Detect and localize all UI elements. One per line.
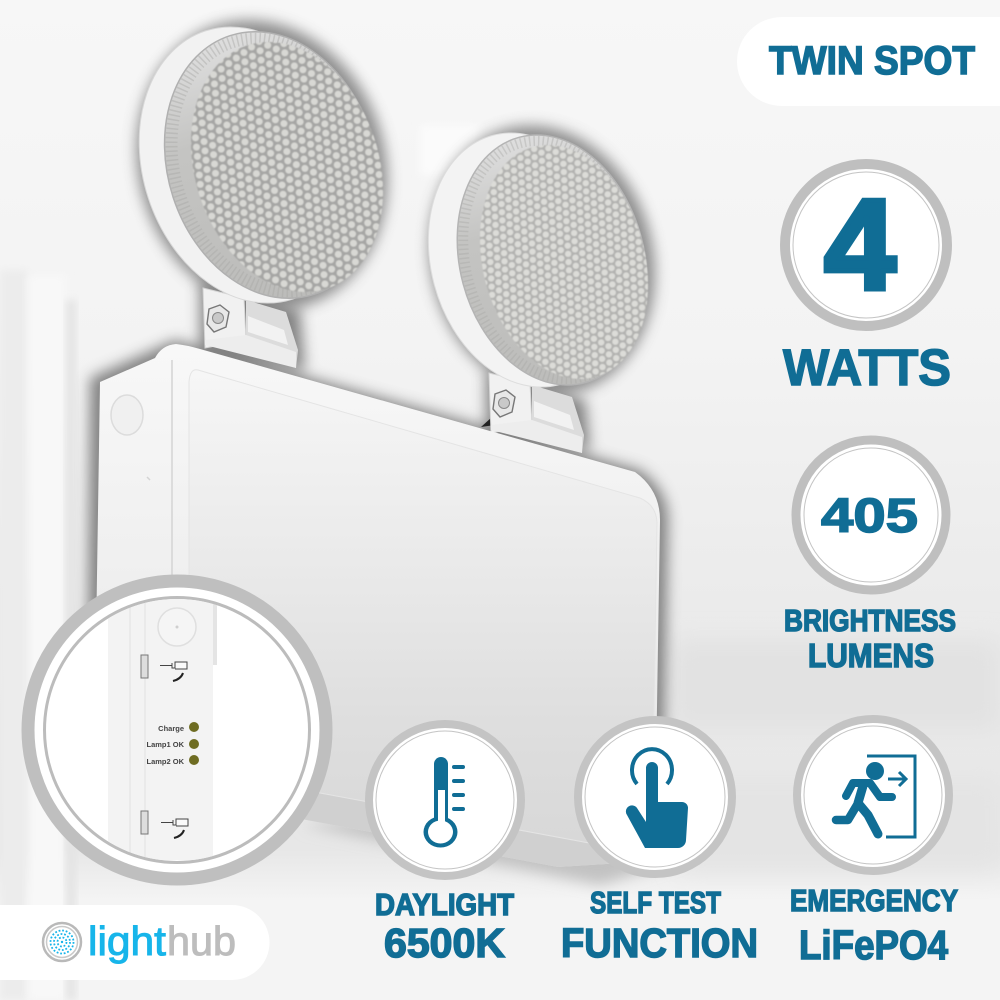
inner line — [585, 727, 725, 867]
ring — [796, 440, 946, 590]
label: Charge: Charge — [158, 724, 184, 733]
ring — [785, 164, 947, 326]
inner line — [804, 726, 942, 864]
emergency label: EMERGENCY — [790, 883, 958, 918]
number 4: 4 — [824, 173, 896, 317]
badge text: TWIN SPOT — [769, 39, 975, 83]
watts label: WATTS — [783, 339, 951, 396]
mounting bracket — [489, 373, 584, 453]
ring — [578, 720, 732, 874]
function label: FUNCTION — [561, 920, 758, 966]
stat: 4 watts — [783, 164, 951, 396]
ring — [797, 719, 949, 871]
lamp housing — [105, 0, 393, 332]
lens rim — [430, 114, 674, 406]
6500K label: 6500K — [384, 920, 505, 966]
brightness label: BRIGHTNESS — [784, 603, 956, 638]
icon: thermometer — [424, 757, 463, 848]
cable — [481, 417, 495, 427]
badge: twin spot — [737, 17, 1000, 106]
pill background — [0, 905, 270, 980]
enclosure side detail — [108, 590, 217, 860]
stat: 405 lumens — [784, 440, 956, 674]
lens dot texture — [160, 17, 414, 317]
number 405: 405 — [821, 490, 918, 543]
enclosure front panel — [189, 370, 657, 843]
status LEDs — [189, 722, 199, 765]
lamp shadow glow — [400, 100, 684, 420]
inner line — [376, 731, 514, 869]
lumens label: LUMENS — [808, 637, 934, 674]
rim ridges — [140, 12, 404, 318]
enclosure and lamp drop shadows — [88, 280, 668, 860]
label: Lamp1 OK: Lamp1 OK — [146, 740, 185, 749]
inset: status indicators close-up — [28, 581, 326, 879]
icon: running exit — [836, 756, 915, 837]
wordmark: hub: hub — [167, 918, 236, 964]
inset outer ring — [28, 581, 326, 879]
feature: daylight 6500K — [369, 724, 521, 966]
ring — [369, 724, 521, 876]
mounting bracket — [203, 288, 298, 368]
lamp housing — [401, 111, 651, 409]
lamp head: right — [400, 100, 684, 453]
rim ridges — [438, 121, 666, 399]
icon: touch hand — [626, 749, 688, 848]
wordmark: light: light — [88, 918, 167, 964]
self test label: SELF TEST — [590, 885, 721, 920]
floor shadow below the enclosure — [300, 800, 680, 885]
daylight label: DAYLIGHT — [375, 887, 514, 922]
LiFePO4 label: LiFePO4 — [799, 922, 948, 968]
lens rim — [131, 4, 413, 326]
pill background — [737, 17, 1000, 106]
inner line — [804, 448, 938, 582]
enclosure side edge — [147, 360, 172, 585]
logo badge: lighthub — [0, 905, 270, 980]
lamp shadow glow — [100, 0, 424, 343]
bracket nut — [207, 305, 229, 332]
inset inner ring — [44, 598, 310, 862]
lamp head: left — [100, 0, 424, 368]
inner line — [793, 172, 939, 318]
logo mark — [43, 923, 81, 961]
lens dot texture — [455, 126, 673, 398]
feature: self test function — [561, 720, 758, 966]
emergency light enclosure — [96, 344, 660, 867]
enclosure side knockout — [111, 395, 143, 435]
label: Lamp2 OK: Lamp2 OK — [146, 757, 185, 766]
enclosure body — [96, 344, 660, 867]
enclosure bottom lip — [280, 783, 640, 867]
bracket nut — [493, 390, 515, 417]
feature: emergency LiFePO4 — [790, 719, 958, 968]
